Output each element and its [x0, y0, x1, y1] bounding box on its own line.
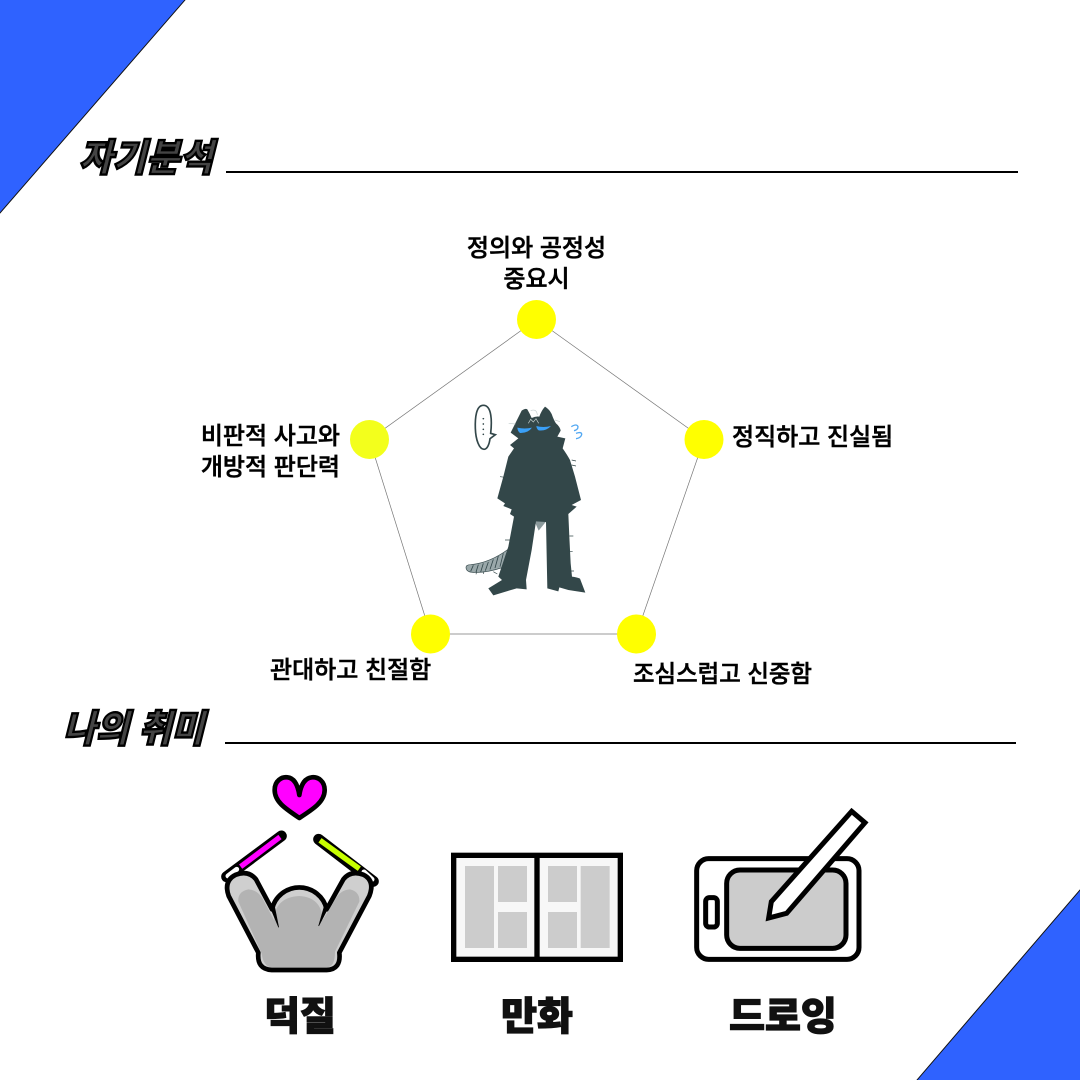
label: generous: 관대하고 친절함	[270, 657, 431, 684]
label: careful: 조심스럽고 신중함	[633, 661, 812, 688]
label: justice and fairness: 중요시	[503, 266, 570, 293]
node: bottom left	[411, 614, 450, 654]
sweat marks	[571, 425, 582, 439]
node: left	[350, 420, 389, 459]
corner triangle: top left	[0, 0, 185, 213]
person	[227, 873, 371, 970]
label: fandom: 덕질	[264, 996, 336, 1039]
eyes	[517, 426, 551, 433]
heart	[275, 777, 325, 818]
pentagon diagram	[350, 300, 724, 654]
label: manga: 만화	[501, 996, 573, 1039]
character illustration	[466, 405, 585, 595]
icon: drawing tablet and pen	[697, 811, 865, 959]
speech bubble	[475, 405, 495, 449]
label: justice and fairness: 정의와 공정성	[467, 235, 606, 262]
icon: fan with lightsticks and heart	[227, 777, 373, 970]
label: critical thinking: 개방적 판단력	[201, 454, 340, 481]
right lightstick	[319, 839, 373, 881]
heading: self analysis: 자기분석	[77, 138, 221, 180]
corner triangle: bottom right	[917, 890, 1080, 1080]
body silhouette	[488, 407, 585, 595]
label: critical thinking: 비판적 사고와	[201, 423, 340, 450]
label: drawing: 드로잉	[729, 996, 837, 1039]
heading: my hobbies: 나의 취미	[61, 709, 212, 751]
label: honest: 정직하고 진실됨	[732, 424, 893, 451]
fur ticks	[476, 460, 576, 574]
tail	[466, 520, 547, 572]
left lightstick	[227, 836, 281, 877]
node: top	[517, 300, 556, 339]
node: right	[684, 420, 724, 459]
icon: manga pages	[454, 855, 620, 959]
node: bottom right	[617, 614, 656, 654]
